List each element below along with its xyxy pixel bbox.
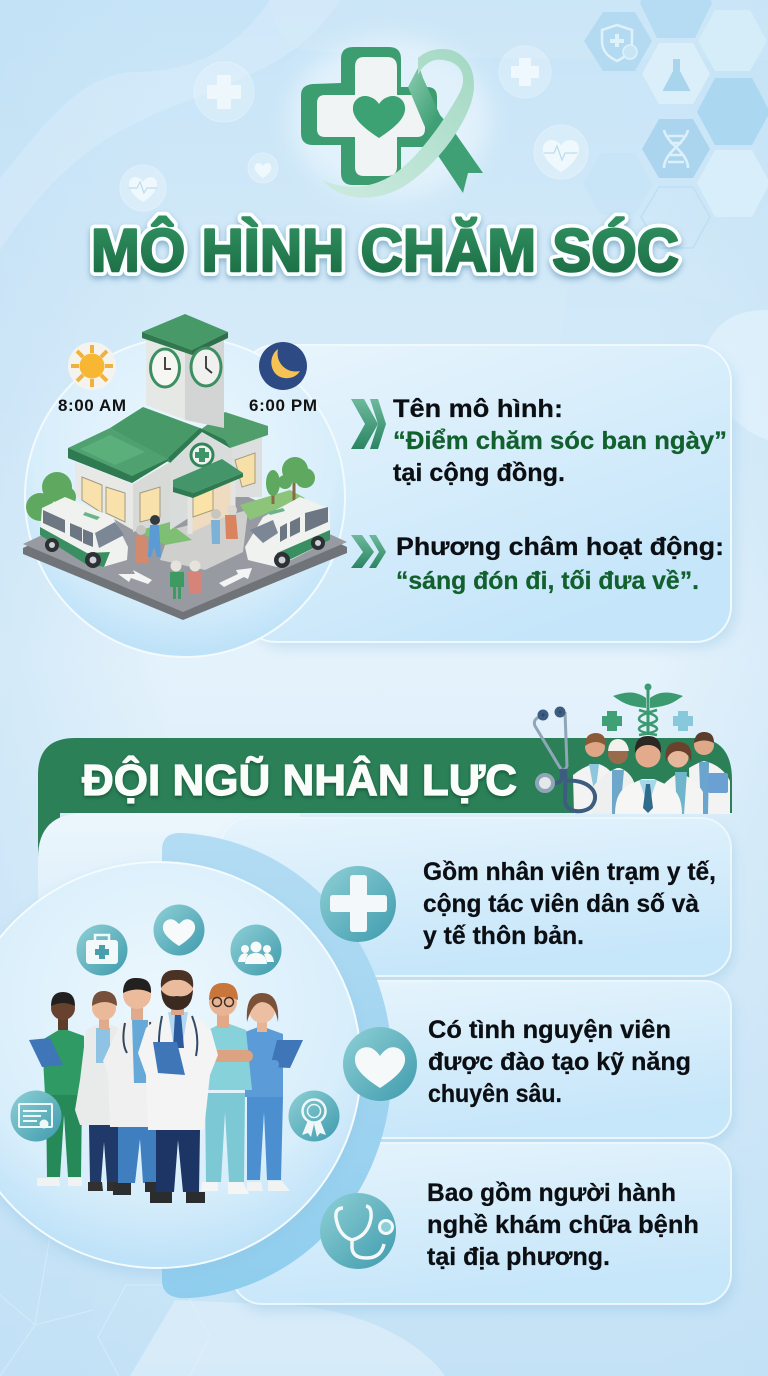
logo: cross, heart and ribbon: [290, 38, 490, 198]
grass: [135, 520, 192, 545]
icon: green plus: [602, 711, 622, 731]
icon: flask: [663, 59, 690, 91]
icon: medical kit: [76, 924, 128, 976]
gable wall: [170, 432, 232, 530]
icon: shield: [602, 25, 637, 61]
person: doctor woman: [75, 991, 121, 1191]
icon: stethoscope badge: [320, 1193, 396, 1269]
text: card 3: [427, 1179, 699, 1271]
people near vans: [135, 505, 238, 599]
porch: [190, 475, 233, 533]
icon: moon: [259, 342, 307, 390]
doctor 4: [663, 742, 703, 814]
crescent ring: [162, 833, 392, 1298]
icon: dna: [664, 130, 688, 168]
panel: workforce backdrop: [38, 813, 300, 1000]
text: card 1: cộng tác viên dân số và: [423, 890, 699, 918]
van right: [245, 497, 330, 568]
icon: stethoscope in heading: [534, 708, 595, 811]
text: motto: Phương châm hoạt động:: [396, 533, 724, 561]
card 1: [220, 818, 734, 982]
ribbon pale band: [322, 49, 474, 198]
clock faces: [150, 349, 180, 387]
disc behind the building: [25, 337, 345, 657]
text: card 1: y tế thôn bản.: [423, 922, 584, 950]
person: blue scrubs: [243, 993, 303, 1191]
text: card 2: Có tình nguyện viên: [428, 1016, 671, 1044]
icon: sun: [68, 342, 116, 390]
doctor 5: [689, 732, 730, 814]
left roof: [68, 428, 168, 483]
van left: [40, 497, 128, 568]
bubble: plus right: [499, 46, 551, 98]
icon: certificate: [10, 1090, 62, 1142]
medical team in heading: [573, 732, 730, 814]
icon: blue plus: [673, 711, 693, 731]
right wing: [225, 433, 262, 497]
text: card 2: được đào tạo kỹ năng: [428, 1048, 691, 1076]
doctor 1: [573, 733, 611, 814]
ribbon green band: [408, 66, 483, 193]
cross sign: [191, 444, 213, 466]
heading band: workforce: [38, 738, 732, 880]
text: card 2: chuyên sâu.: [428, 1080, 562, 1108]
arrow: chevrons 1: [351, 399, 386, 449]
icon: plus badge: [320, 866, 396, 942]
icon: community: [230, 924, 282, 976]
person: doctor man: [103, 978, 160, 1195]
text: motto: [396, 533, 724, 595]
text: model name: [393, 395, 727, 487]
text: model name: “Điểm chăm sóc ban ngày”: [393, 427, 727, 455]
pavement: [160, 510, 248, 570]
label: 6:00 PM: 6:00 PM: [249, 396, 317, 415]
title: MÔ HÌNH CHĂM SÓC: [91, 217, 679, 284]
card 2: [330, 981, 734, 1144]
bubble: plus: [194, 62, 254, 122]
hexagon pattern: science icons: [583, 0, 768, 248]
doctor 3: [615, 736, 682, 814]
middle roof: [110, 407, 200, 463]
white cross: [317, 57, 425, 176]
trees: [26, 457, 315, 521]
panel: care model: [23, 314, 736, 657]
person: teal scrubs: [201, 983, 253, 1194]
text: motto: “sáng đón đi, tối đưa về”.: [396, 567, 699, 595]
icon: heart: [154, 904, 204, 956]
caduceus: [613, 684, 683, 735]
arrow: chevrons 2: [351, 535, 386, 568]
text: card 3: nghề khám chữa bệnh: [427, 1211, 699, 1239]
bubble: heart: [248, 153, 278, 183]
card 3: [232, 1143, 734, 1311]
bubble: heartbeat: [120, 165, 166, 211]
text: card 3: tại địa phương.: [427, 1243, 610, 1271]
heading band: workforce: ĐỘI NGŨ NHÂN LỰC: [82, 754, 517, 805]
illustration: day-care centre: [23, 314, 347, 620]
green cross: [301, 47, 437, 185]
heart: [353, 96, 405, 138]
person: lead doctor: [138, 970, 218, 1203]
icon: heart badge: [343, 1027, 417, 1101]
text: model name: Tên mô hình:: [393, 395, 563, 423]
person: green scrubs: [29, 992, 84, 1186]
road platform: [23, 470, 347, 620]
disc: team: [0, 862, 363, 1276]
icon: award: [288, 1090, 340, 1142]
text: card 3: Bao gồm người hành: [427, 1179, 676, 1207]
left wall: [75, 462, 133, 530]
text: card 1: Gồm nhân viên trạm y tế,: [423, 858, 716, 886]
doctor 2: [592, 739, 634, 814]
road arrows: [118, 570, 152, 584]
tower: [142, 314, 228, 428]
text: card 1: [423, 858, 716, 950]
text: card 2: [428, 1016, 691, 1108]
label: 8:00 AM: 8:00 AM: [58, 396, 126, 415]
floating bubbles: [120, 46, 588, 211]
title: MÔ HÌNH CHĂM SÓC: [91, 217, 679, 284]
bubble: heartbeat right: [534, 125, 588, 179]
text: model name: tại cộng đồng.: [393, 459, 565, 487]
tree trunks: [45, 482, 294, 529]
